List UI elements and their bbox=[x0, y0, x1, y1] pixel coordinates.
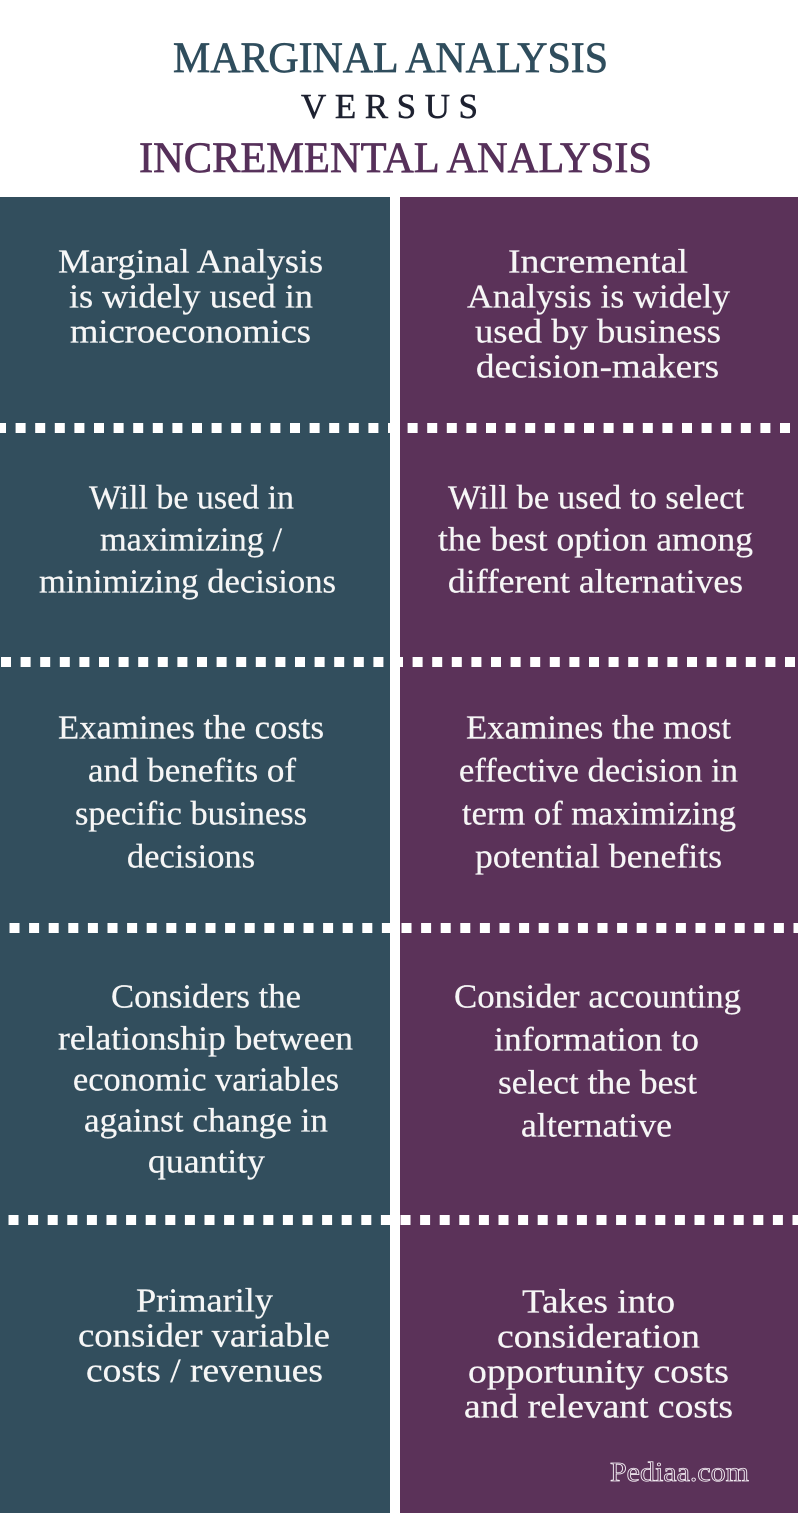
title: versus: VERSUS bbox=[301, 87, 478, 126]
text: row 1 right: used by business bbox=[475, 314, 721, 351]
title: marginal analysis: MARGINAL ANALYSIS bbox=[173, 35, 608, 82]
text: row 4 left: economic variables bbox=[73, 1062, 339, 1099]
panel: incremental analysis column bbox=[400, 197, 798, 1513]
text: row 3 left: and benefits of bbox=[88, 753, 297, 790]
text: row 2 right: the best option among bbox=[438, 522, 753, 559]
text: row 1 right: Incremental bbox=[508, 244, 688, 281]
text: row 1 right bbox=[467, 244, 730, 386]
text: row 2 left: Will be used in bbox=[89, 480, 294, 517]
text: row 5 left: consider variable bbox=[78, 1318, 330, 1355]
text: row 2 right: different alternatives bbox=[448, 564, 743, 601]
text: row 4 left bbox=[58, 979, 353, 1181]
title: incremental analysis: INCREMENTAL ANALYSIS bbox=[139, 135, 652, 182]
text: row 2 left: minimizing decisions bbox=[39, 564, 336, 601]
text: row 1 right: Analysis is widely bbox=[467, 279, 730, 316]
text: row 2 left bbox=[39, 480, 336, 601]
text: row 3 right: term of maximizing bbox=[462, 796, 736, 833]
text: row 5 right: and relevant costs bbox=[464, 1389, 733, 1426]
text: row 4 right: select the best bbox=[498, 1065, 698, 1102]
text: row 3 right: potential benefits bbox=[475, 839, 722, 876]
text: row 2 right: Will be used to select bbox=[448, 480, 745, 517]
text: row 5 right: Takes into bbox=[522, 1284, 675, 1321]
text: row 3 right: Examines the most bbox=[466, 710, 732, 747]
text: row 3 right bbox=[459, 710, 738, 876]
text: row 4 right bbox=[454, 979, 741, 1145]
text: row 5 left: Primarily bbox=[136, 1283, 273, 1320]
text: row 2 left: maximizing / bbox=[100, 522, 283, 559]
text: row 1 right: decision-makers bbox=[476, 349, 719, 386]
text: row 5 right: opportunity costs bbox=[468, 1354, 729, 1391]
text: row 5 left bbox=[78, 1283, 330, 1390]
text: row 3 left: decisions bbox=[127, 839, 255, 876]
text: row 3 left: specific business bbox=[75, 796, 307, 833]
text: row 4 left: relationship between bbox=[58, 1021, 353, 1058]
text: row 4 left: quantity bbox=[148, 1144, 265, 1181]
text: row 3 left: Examines the costs bbox=[58, 710, 324, 747]
text: row 4 left: against change in bbox=[84, 1103, 328, 1140]
title block bbox=[139, 35, 652, 182]
text: row 1 left bbox=[58, 244, 323, 351]
text: row 5 right bbox=[464, 1284, 733, 1426]
text: row 1 left: Marginal Analysis bbox=[58, 244, 323, 281]
text: row 2 right bbox=[438, 480, 753, 601]
logo: Pediaa.com: Pediaa.com bbox=[610, 1457, 749, 1487]
text: row 4 right: information to bbox=[494, 1022, 699, 1059]
text: row 5 right: consideration bbox=[497, 1319, 700, 1356]
text: row 4 left: Considers the bbox=[111, 979, 301, 1016]
text: row 3 left bbox=[58, 710, 324, 876]
text: row 1 left: microeconomics bbox=[70, 314, 311, 351]
text: row 5 left: costs / revenues bbox=[86, 1353, 323, 1390]
panel: marginal analysis column bbox=[0, 197, 390, 1513]
text: row 1 left: is widely used in bbox=[69, 279, 313, 316]
text: row 3 right: effective decision in bbox=[459, 753, 738, 790]
text: row 4 right: alternative bbox=[521, 1108, 672, 1145]
text: row 4 right: Consider accounting bbox=[454, 979, 741, 1016]
